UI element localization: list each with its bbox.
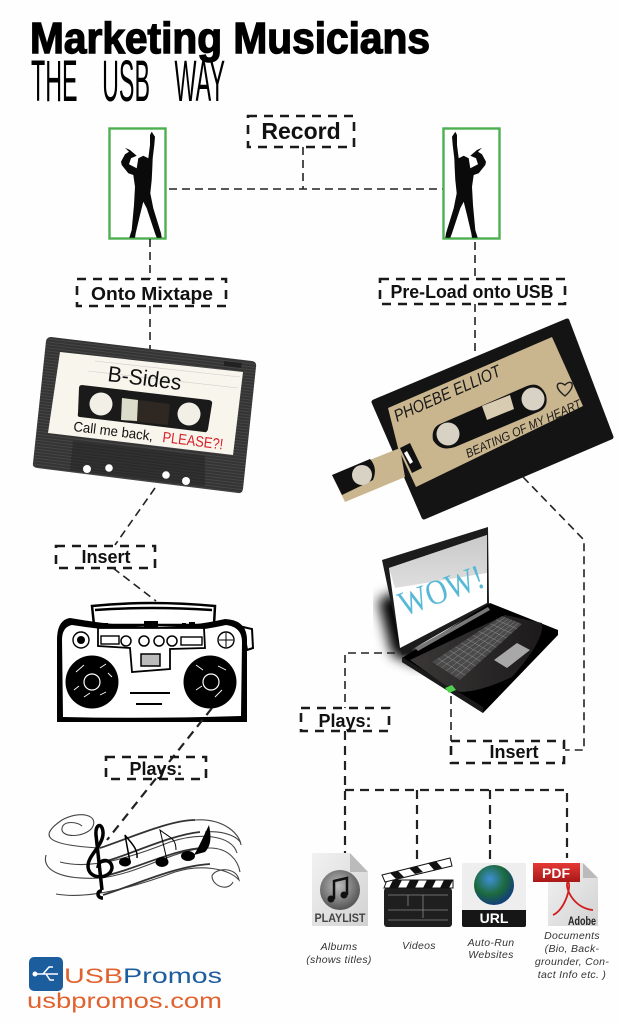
label: Pre-Load onto USB: Pre-Load onto USB: [390, 281, 554, 302]
icon: playlist file: PLAYLIST: [314, 913, 366, 925]
icon: PDF document: PDF: [542, 865, 570, 881]
caption: documents: (Bio, Back-: [545, 943, 600, 955]
caption: albums: Albums: [320, 941, 358, 953]
screen text: WOW!: [393, 557, 489, 624]
label: left Plays: Plays:: [129, 759, 183, 779]
connector: usb to insert: [523, 477, 584, 750]
tape window: [433, 385, 547, 448]
panel: right artist: [444, 128, 500, 238]
icon: URL globe: [462, 863, 526, 927]
label: left Insert: [56, 546, 155, 568]
label: right Plays: [301, 708, 389, 731]
icon: right singer silhouette: [445, 132, 486, 238]
connector: tape to insert: [115, 488, 155, 545]
label: right Insert: [451, 741, 564, 763]
label: Onto Mixtape: [77, 279, 226, 306]
website: usbpromos.com: [27, 990, 222, 1013]
illustration: laptop: [378, 527, 558, 713]
illustration: B-Sides cassette: [33, 337, 256, 493]
usb stick: [332, 448, 405, 502]
tape note in red: PLEASE?!: [162, 429, 224, 453]
caption: documents: tact Info etc. ): [538, 969, 606, 981]
connector: plays to outputs: [345, 731, 567, 863]
logo: [27, 957, 222, 1013]
label: right Insert: Insert: [489, 742, 539, 762]
label: Record: [248, 116, 354, 147]
icon: usb logo: [29, 957, 63, 991]
tape note: Call me back,: [73, 418, 154, 444]
caption: websites: Websites: [468, 949, 514, 961]
connector: insert to boombox: [113, 568, 156, 601]
icon: PDF document: Adobe: [568, 914, 596, 928]
label: right Plays: Plays:: [318, 711, 372, 731]
illustration: boombox: [57, 603, 253, 722]
connector: laptop to insert: [450, 696, 452, 741]
label: left Plays: [106, 757, 206, 779]
connector: record to artists: [169, 147, 443, 189]
icon: URL globe: URL: [480, 910, 509, 926]
icon: clapperboard: [382, 858, 453, 927]
caption: albums: (shows titles): [306, 954, 372, 966]
label: left Insert: Insert: [81, 547, 131, 567]
connector: left artist to tape: [149, 239, 151, 350]
illustration: music staff: [45, 815, 241, 898]
text: THE USB WAY: [31, 49, 225, 114]
caption: documents: Documents: [544, 930, 600, 942]
tape title: B-Sides: [106, 361, 183, 395]
connector: boombox to plays to music: [107, 708, 212, 840]
icon: left singer silhouette: [121, 132, 162, 238]
caption: videos: Videos: [402, 940, 436, 952]
panel: left artist: [110, 128, 166, 238]
caption: documents: grounder, Con-: [535, 956, 609, 968]
tape song name: BEATING OF MY HEART: [464, 397, 584, 461]
illustration: USB cassette: [332, 321, 611, 517]
icon: playlist file: [312, 853, 368, 926]
caption: websites: Auto-Run: [467, 937, 514, 949]
brand name: USB Promos: [64, 965, 222, 988]
title: Marketing Musicians: [30, 14, 430, 63]
icon: PDF document: [533, 863, 598, 928]
label: Record: Record: [261, 118, 341, 144]
icon: heart: [557, 382, 572, 396]
label: Onto Mixtape: Onto Mixtape: [91, 283, 213, 304]
tape artist name: PHOEBE ELLIOT: [391, 361, 505, 426]
connector: right artist to usb: [474, 242, 476, 356]
connector: laptop to plays: [345, 653, 395, 708]
